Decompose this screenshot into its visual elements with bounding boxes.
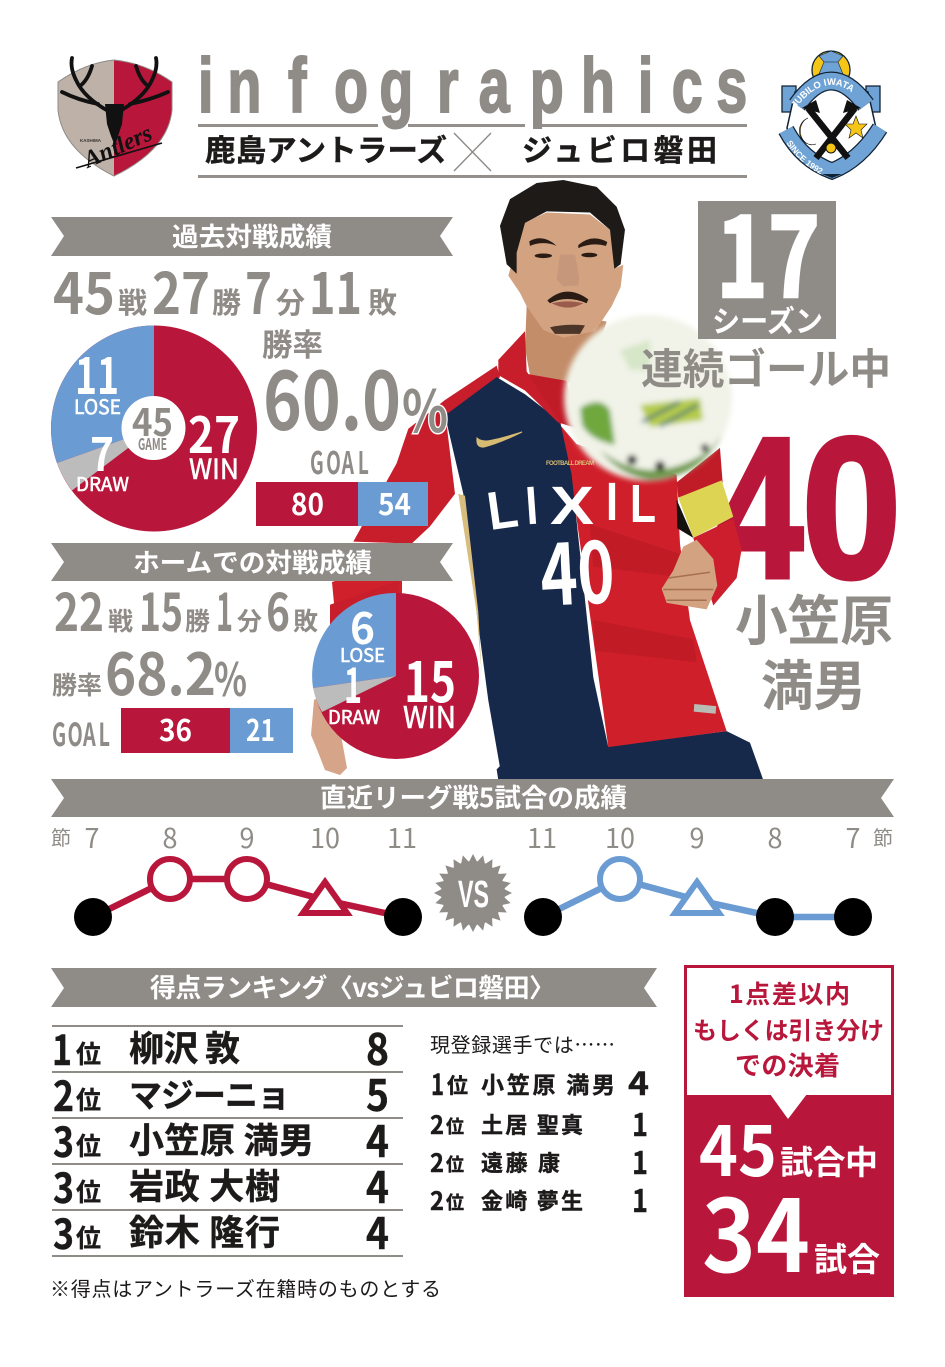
badge: 17 seasons: 17 xyxy=(716,169,820,329)
collar xyxy=(498,331,562,425)
callout: close games xyxy=(684,966,894,1301)
round numbers: 節 xyxy=(51,822,71,851)
home record line: 1 xyxy=(216,571,233,646)
ranking table: マジーニョ xyxy=(129,1069,290,1117)
current squad list: 位 xyxy=(447,1070,468,1100)
current squad list: 遠藤 康 xyxy=(481,1146,560,1178)
record line: 勝 xyxy=(212,280,241,322)
home record line: 15 xyxy=(139,571,183,646)
goals bar: all matches: 80 xyxy=(291,480,324,524)
round numbers: 7 xyxy=(84,817,100,856)
callout: close games: での決着 xyxy=(735,1046,840,1083)
jersey red half xyxy=(557,421,727,747)
current squad list: 2 xyxy=(430,1182,444,1218)
match title: ジュビロ磐田 xyxy=(522,126,717,170)
goals bar: home: 21 xyxy=(246,706,275,750)
home win rate xyxy=(52,628,247,712)
pie chart: all matches: 11 xyxy=(75,337,119,409)
pie chart: all matches: LOSE xyxy=(74,391,121,420)
banner: home record xyxy=(51,543,453,581)
banner: past record: 過去対戦成績 xyxy=(172,217,332,254)
ranking table: 3 xyxy=(53,1155,74,1215)
LIXIL jersey text xyxy=(483,472,656,542)
logo: Kashima Antlers crest: Antlers xyxy=(78,120,156,174)
callout: close games: 1点差以内 xyxy=(729,975,850,1011)
current squad list: 1 xyxy=(632,1176,648,1221)
form chart: Jubilo xyxy=(524,859,872,936)
ranking table: 4 xyxy=(366,1154,389,1216)
home win rate: % xyxy=(214,644,247,710)
logo: Jubilo Iwata crest: SINCE 1992 xyxy=(787,140,823,174)
win rate: % xyxy=(402,365,448,449)
banner: last 5 matches xyxy=(51,778,894,817)
current squad list xyxy=(430,1029,649,1221)
current squad list: 2 xyxy=(430,1106,444,1142)
current squad list: 小笠原 満男 xyxy=(481,1066,615,1100)
pie chart: home matches: 1 xyxy=(344,647,362,717)
LIXIL jersey text: I xyxy=(606,472,618,532)
ranking table: 岩政 大樹 xyxy=(129,1159,280,1210)
current squad list: 位 xyxy=(446,1189,464,1215)
title: infographics: infographics xyxy=(198,43,747,129)
round numbers: 節 xyxy=(873,822,893,851)
round numbers: 7 xyxy=(846,817,860,856)
moustache and mouth xyxy=(547,292,588,303)
ranking table: 3 xyxy=(53,1201,74,1261)
round numbers: 8 xyxy=(162,817,178,856)
home record line: 勝 xyxy=(185,602,210,638)
big number 40: 4 xyxy=(716,397,803,620)
ranking table: 位 xyxy=(76,1219,101,1255)
record line: 戦 xyxy=(118,280,147,322)
record line: 分 xyxy=(276,280,305,322)
goals bar: home xyxy=(52,706,293,756)
current squad list: 1 xyxy=(632,1100,648,1145)
football xyxy=(564,315,732,481)
current squad list: 現登録選手では…… xyxy=(430,1029,615,1058)
ranking table: 2 xyxy=(53,1063,74,1123)
ranking table: 位 xyxy=(76,1035,101,1071)
logo: Jubilo Iwata crest xyxy=(778,50,888,180)
pie chart: all matches xyxy=(51,326,257,532)
record line: 27 xyxy=(152,249,210,331)
nose xyxy=(557,255,579,286)
VS burst: VS xyxy=(458,874,489,916)
home record line: 分 xyxy=(237,602,262,638)
current squad list: 2 xyxy=(430,1144,444,1180)
jersey navy half xyxy=(445,377,608,767)
pie chart: home matches: LOSE xyxy=(340,641,385,668)
banner: scoring ranking: 得点ランキング〈vsジュビロ磐田〉 xyxy=(150,968,555,1005)
current squad list: 1 xyxy=(431,1062,444,1104)
pie chart: all matches: 7 xyxy=(90,419,114,485)
home record line: 敗 xyxy=(293,602,318,638)
sleeve left xyxy=(353,366,500,544)
goals bar: all matches: GOAL xyxy=(310,439,369,484)
record line: 敗 xyxy=(368,280,397,322)
current squad list: 金崎 夢生 xyxy=(481,1184,583,1216)
pie chart: all matches: 45 xyxy=(132,392,173,447)
pie chart: all matches: GAME xyxy=(138,431,167,455)
big number 40: 0 xyxy=(802,397,901,620)
current squad list: 土居 聖真 xyxy=(481,1108,583,1140)
win rate: 60.0 xyxy=(263,338,401,454)
home record line: 22 xyxy=(54,571,104,646)
callout: close games: もしくは引き分け xyxy=(693,1011,884,1046)
photo: player Ogasawara xyxy=(311,180,763,780)
callout: close games: 試合 xyxy=(814,1233,880,1281)
home win rate: 68.2 xyxy=(105,628,216,712)
current squad list: 位 xyxy=(446,1113,464,1139)
callout: close games: 試合中 xyxy=(780,1136,878,1184)
pie chart: home matches: WIN xyxy=(403,693,456,737)
home record line: 6 xyxy=(266,571,290,646)
ranking table: 鈴木 隆行 xyxy=(129,1205,280,1256)
player name xyxy=(735,577,893,721)
goals bar: home: 36 xyxy=(159,706,192,750)
round numbers: 9 xyxy=(240,817,254,856)
ranking table: 位 xyxy=(76,1127,101,1163)
right hand xyxy=(662,540,717,609)
round numbers: 10 xyxy=(310,817,340,856)
home record line: 戦 xyxy=(108,602,133,638)
player name: 満男 xyxy=(761,642,866,721)
big number 40 xyxy=(716,397,901,620)
home record line xyxy=(54,571,318,646)
ranking table: 1 xyxy=(52,1017,72,1077)
goals bar: home: GOAL xyxy=(52,709,110,756)
sponsor small text: FOOTBALL DREAM xyxy=(546,461,594,467)
round numbers: 10 xyxy=(605,817,635,856)
ranking table: 小笠原 満男 xyxy=(129,1113,314,1164)
form chart: Antlers xyxy=(74,859,422,936)
shorts xyxy=(497,731,763,780)
text: consecutive goals: 連続ゴール中 xyxy=(641,336,891,397)
banner: scoring ranking xyxy=(51,968,657,1007)
ranking table: 8 xyxy=(366,1016,389,1078)
Nike swoosh xyxy=(477,432,522,447)
hair xyxy=(500,180,625,274)
round numbers: 11 xyxy=(387,817,417,856)
match title xyxy=(205,126,717,171)
LIXIL jersey text: L xyxy=(483,478,522,542)
ranking table: 5 xyxy=(366,1062,389,1124)
neck xyxy=(525,306,607,385)
callout: close games: 34 xyxy=(702,1156,810,1301)
ranking table: 4 xyxy=(366,1200,389,1262)
LIXIL jersey text: I xyxy=(524,476,540,536)
match title: 鹿島アントラーズ xyxy=(205,126,447,170)
pie chart: all matches: WIN xyxy=(189,448,239,488)
LIXIL jersey text: X xyxy=(550,476,594,536)
pie chart: home matches: 6 xyxy=(350,595,375,657)
round numbers: 11 xyxy=(527,817,557,856)
round numbers: 9 xyxy=(690,817,704,856)
header rules xyxy=(198,124,747,178)
pie chart: home matches: DRAW xyxy=(328,703,380,730)
pie chart: all matches: DRAW xyxy=(76,470,129,497)
goals bar: all matches xyxy=(256,439,428,526)
banner: home record: ホームでの対戦成績 xyxy=(133,543,372,580)
home win rate: 勝率 xyxy=(52,666,102,702)
record line: 7 xyxy=(245,249,272,331)
ranking table: 3 xyxy=(53,1109,74,1169)
callout: close games: 45 xyxy=(699,1096,777,1196)
goals bar: all matches: 54 xyxy=(378,480,411,524)
banner: past record xyxy=(51,217,453,256)
pie chart: all matches: 27 xyxy=(188,396,240,468)
ranking table: 4 xyxy=(366,1108,389,1170)
footnote: ※得点はアントラーズ在籍時のものとする xyxy=(50,1273,441,1302)
round numbers xyxy=(51,817,893,856)
logo: Jubilo Iwata crest: JUBILO IWATA xyxy=(792,78,853,106)
record line xyxy=(53,249,397,331)
eyes and brows xyxy=(529,238,607,248)
ranking table: 柳沢 敦 xyxy=(129,1021,240,1072)
record line: 45 xyxy=(53,249,115,331)
tag xyxy=(694,704,716,714)
ranking table xyxy=(52,1016,389,1262)
VS burst xyxy=(429,849,517,937)
current squad list: 1 xyxy=(632,1138,648,1183)
ranking table: 位 xyxy=(76,1081,101,1117)
logo: Kashima Antlers crest xyxy=(58,58,172,176)
record line: 11 xyxy=(309,249,362,331)
left forearm and hand xyxy=(332,560,402,640)
logo: Kashima Antlers crest: KASHIMA xyxy=(80,138,102,143)
table rules xyxy=(52,1025,403,1257)
badge: 17 seasons: シーズン xyxy=(712,297,823,341)
captain armband xyxy=(677,448,723,498)
ranking table: 位 xyxy=(76,1173,101,1209)
player name: 小笠原 xyxy=(735,577,893,656)
shirt number 40: 40 xyxy=(537,506,617,631)
LIXIL jersey text: L xyxy=(630,474,656,534)
win rate: 勝率 xyxy=(262,320,323,365)
round numbers: 8 xyxy=(768,817,782,856)
current squad list: 位 xyxy=(446,1151,464,1177)
pie chart: home matches xyxy=(312,593,479,759)
face xyxy=(508,213,623,338)
current squad list: 4 xyxy=(628,1059,649,1105)
banner: last 5 matches: 直近リーグ戦5試合の成績 xyxy=(320,778,627,815)
pie chart: home matches: 15 xyxy=(404,638,456,718)
